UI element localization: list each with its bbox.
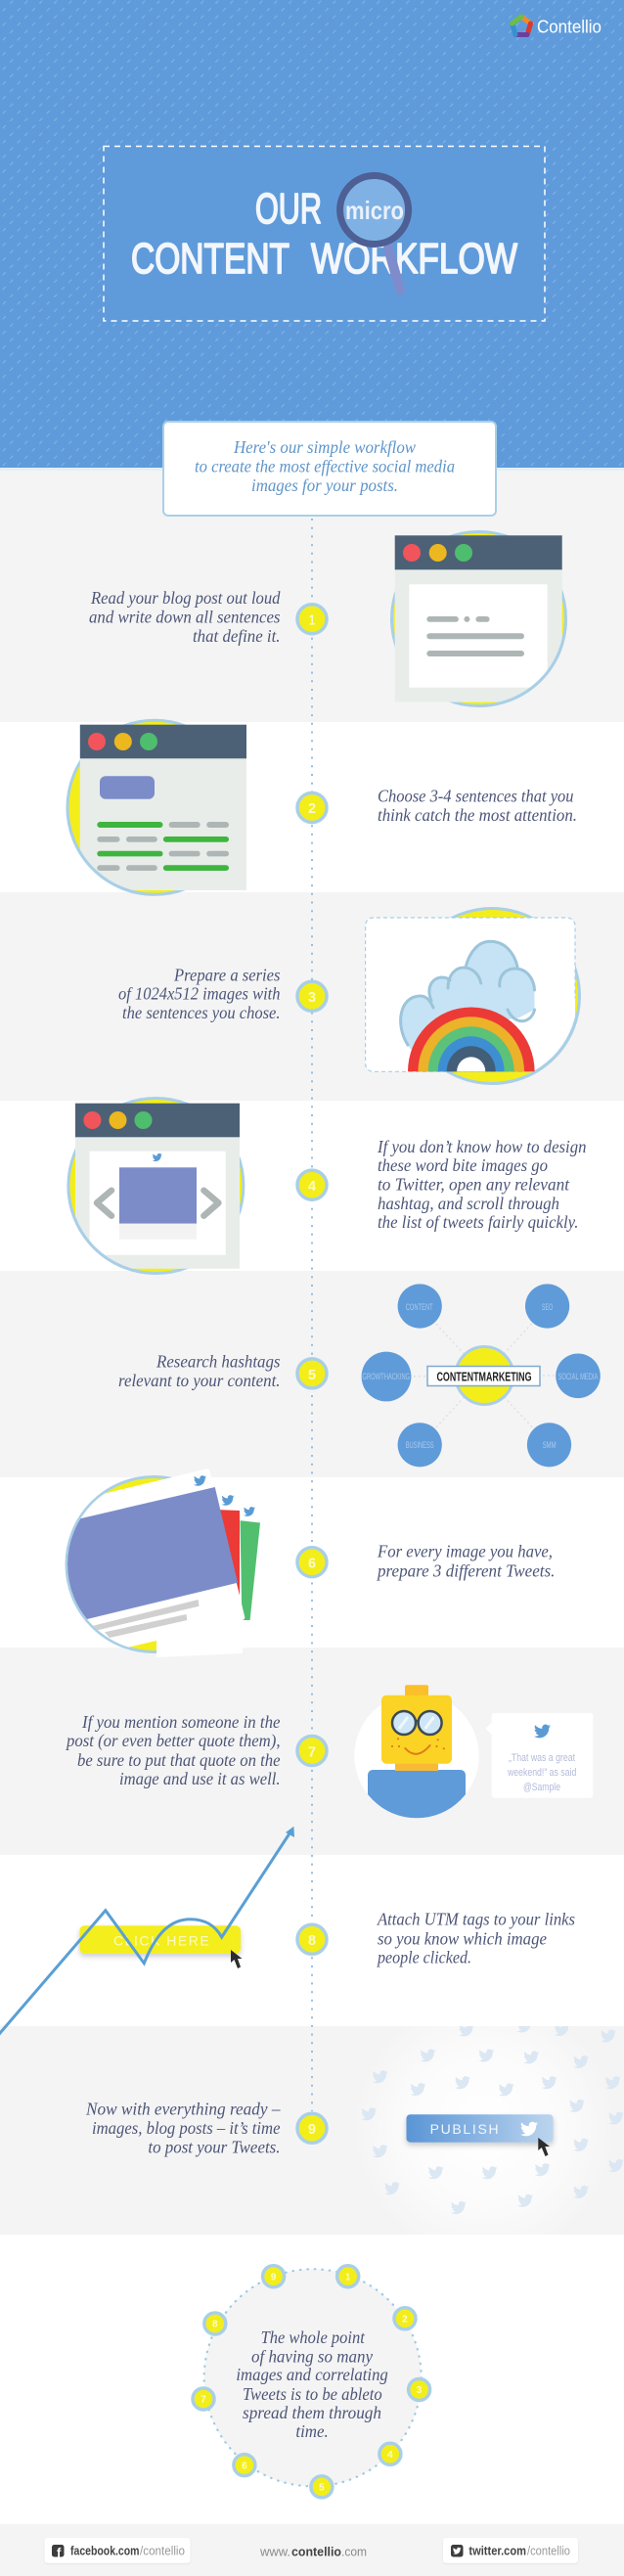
step 9 button: publish	[407, 2114, 554, 2143]
step 6 illustration: stacked tweet cards	[65, 1469, 260, 1657]
footer: twitter	[443, 2538, 578, 2563]
step 4 text: If you don’t know how to design	[377, 1137, 587, 1156]
step 4 text: to Twitter, open any relevant	[378, 1175, 570, 1195]
footer: facebook: f	[57, 2546, 62, 2559]
footer: website: www.	[259, 2544, 290, 2559]
small numbered circles: 9	[271, 2272, 277, 2282]
step 8 text	[376, 1910, 575, 1967]
number badges: 5	[308, 1367, 316, 1383]
step 3 text: of 1024x512 images with	[118, 984, 281, 1004]
step 5 illustration: hashtag network: SEO	[542, 1302, 553, 1312]
intro box: to create the most effective social media	[195, 456, 455, 475]
step 1 illustration: browser with text lines	[391, 532, 565, 706]
number badges: 7	[308, 1743, 316, 1761]
step 5 text	[118, 1352, 281, 1390]
closing text: The whole point	[261, 2327, 366, 2347]
closing text	[236, 2327, 388, 2441]
small numbered circles	[193, 2266, 430, 2498]
closing text: time.	[295, 2421, 329, 2441]
cloud	[401, 941, 534, 1057]
step 2 text: think catch the most attention.	[378, 805, 577, 825]
small numbered circles: 6	[242, 2461, 247, 2471]
closing text: Tweets is to be ableto	[243, 2384, 382, 2404]
step 7 illustration: character with quote	[354, 1685, 479, 1818]
step 3 text	[118, 966, 281, 1022]
footer: twitter: /contellio	[527, 2544, 570, 2558]
step 1 text: Read your blog post out loud	[90, 588, 281, 608]
footer: website	[259, 2544, 367, 2559]
footer: website: contellio	[291, 2544, 341, 2559]
step 6 text: For every image you have,	[377, 1542, 553, 1561]
intro box	[163, 422, 496, 516]
step 1 text: and write down all sentences	[89, 608, 281, 627]
logo: Contellio: Contellio	[537, 18, 602, 37]
number badges: 8	[308, 1932, 316, 1949]
footer: facebook	[45, 2538, 190, 2563]
small numbered circles: 1	[346, 2272, 350, 2283]
step 8 text: Attach UTM tags to your links	[377, 1910, 575, 1929]
number badges	[297, 605, 327, 2143]
header background	[0, 0, 624, 471]
step 8 button: click here	[79, 1925, 241, 1954]
step 5 text: Research hashtags	[156, 1352, 281, 1372]
quote bubble: weekend!” as said	[507, 1767, 576, 1779]
title frame	[104, 147, 545, 321]
step 5 illustration: hashtag network: SMM	[543, 1440, 557, 1450]
step 7 text: be sure to put that quote on the	[77, 1750, 281, 1770]
small numbered circles: 5	[319, 2483, 325, 2494]
step 3 illustration: image with cloud and rainbow	[366, 908, 579, 1084]
step 5 illustration: hashtag network: SOCIAL MEDIA	[558, 1372, 598, 1381]
title	[131, 185, 517, 283]
step 4 text: the list of tweets fairly quickly.	[378, 1212, 578, 1232]
step 3 text: the sentences you chose.	[122, 1003, 280, 1022]
number badges: 4	[308, 1178, 317, 1195]
footer: twitter: twitter.com	[468, 2544, 526, 2558]
step 2 text: Choose 3-4 sentences that you	[378, 786, 574, 805]
step 7 text: If you mention someone in the	[81, 1712, 281, 1732]
closing text: images and correlating	[236, 2365, 388, 2384]
step 8 button: click here: CLICK HERE	[113, 1933, 209, 1949]
step 7 text	[65, 1712, 281, 1788]
step 4 text: hashtag, and scroll through	[378, 1194, 559, 1213]
arrow: rising trend line	[0, 1827, 294, 2040]
step 5 illustration: hashtag network: CONTENTMARKETING	[436, 1370, 532, 1383]
icon: magnifying glass with micro	[340, 176, 409, 290]
step 4 text	[377, 1137, 587, 1232]
step 7 text: image and use it as well.	[119, 1769, 280, 1788]
small numbered circles: 7	[201, 2395, 206, 2406]
number badges: 9	[308, 2121, 316, 2138]
small numbered circles: 4	[387, 2450, 393, 2461]
number badges: 1	[309, 612, 315, 628]
step 5 illustration: hashtag network: BUSINESS	[406, 1440, 434, 1450]
step 2 illustration: browser with highlighted sentences	[67, 720, 246, 894]
timeline dotted line	[311, 519, 313, 2111]
step 1 text: that define it.	[193, 626, 280, 646]
icon: magnifying glass with micro: micro	[345, 196, 404, 225]
step 9 illustration: scattered birds	[362, 2026, 624, 2214]
intro box: Here's our simple workflow	[233, 437, 416, 457]
step 5 illustration: hashtag network	[362, 1284, 601, 1467]
quote bubble: @Sample	[523, 1782, 560, 1793]
step 4 illustration: browser with image carousel	[68, 1098, 244, 1274]
step 9 button: publish: PUBLISH	[430, 2121, 499, 2137]
quote bubble	[485, 1713, 593, 1798]
step 5 text: relevant to your content.	[118, 1371, 280, 1390]
step 6 text: prepare 3 different Tweets.	[376, 1561, 555, 1581]
step 9 text: to post your Tweets.	[148, 2138, 280, 2157]
step 9 text: images, blog posts – it’s time	[92, 2118, 281, 2138]
small numbered circles: 8	[212, 2320, 218, 2330]
step 9 text	[85, 2100, 281, 2157]
step 5 illustration: hashtag network: GROWTHACKING	[362, 1372, 410, 1381]
logo: Contellio	[513, 17, 602, 37]
intro box: images for your posts.	[251, 475, 398, 495]
step 2 text	[378, 786, 577, 825]
icon: cursor	[231, 1950, 243, 1968]
closing text: of having so many	[251, 2346, 373, 2366]
footer: website: .com	[341, 2544, 367, 2559]
title: WORKFLOW	[311, 235, 517, 283]
closing text: spread them through	[243, 2403, 381, 2422]
step 5 illustration: hashtag network: CONTENT	[406, 1302, 433, 1312]
step 6 text	[376, 1542, 555, 1581]
small numbered circles: 2	[402, 2315, 408, 2325]
step 1 text	[89, 588, 281, 646]
small numbered circles: 3	[417, 2385, 423, 2396]
step 9 text: Now with everything ready –	[85, 2100, 281, 2119]
closing circle	[193, 2266, 430, 2498]
number badges: 3	[308, 989, 316, 1006]
title: OUR	[255, 185, 322, 233]
number badges: 2	[308, 800, 316, 817]
step 7 text: post (or even better quote them),	[65, 1731, 280, 1750]
footer: facebook: facebook.com	[70, 2544, 139, 2558]
step 4 text: these word bite images go	[378, 1155, 548, 1175]
rainbow	[408, 1008, 535, 1071]
footer: facebook: /contellio	[140, 2544, 185, 2558]
quote bubble: „That was a great	[509, 1752, 575, 1764]
step 8 text: people clicked.	[376, 1948, 471, 1967]
icon: publish cursor	[538, 2138, 550, 2156]
title: CONTENT	[131, 235, 290, 283]
step 8 text: so you know which image	[378, 1929, 547, 1949]
number badges: 6	[308, 1556, 316, 1571]
step 3 text: Prepare a series	[173, 966, 281, 985]
